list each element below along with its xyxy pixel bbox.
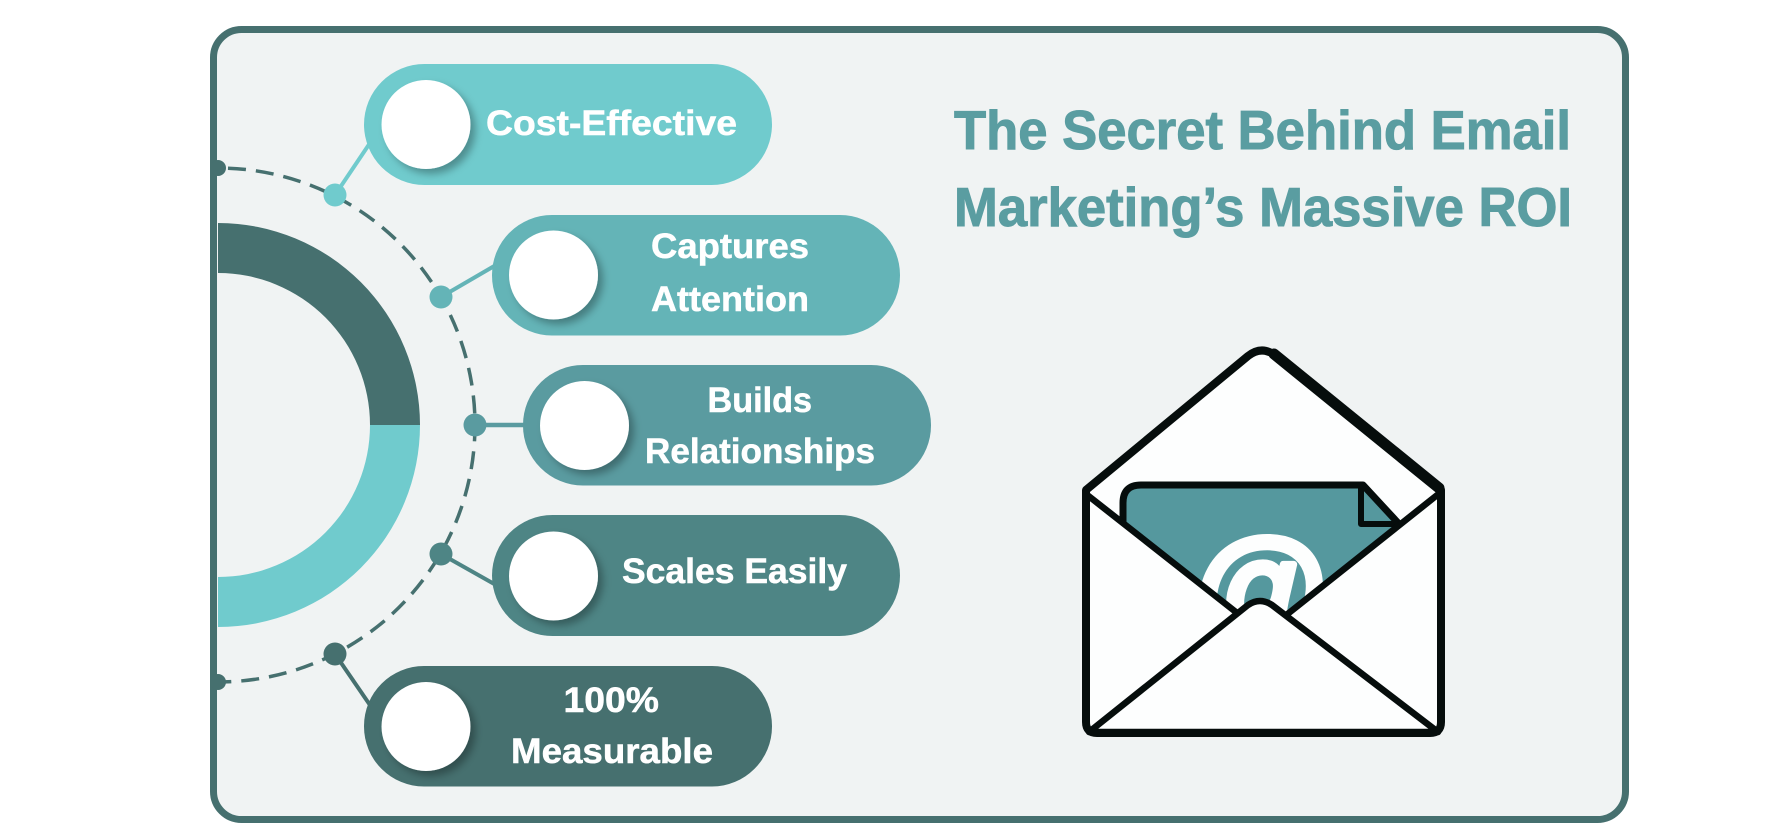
item: Captures Attention	[430, 215, 900, 336]
donut chart: half ring	[218, 223, 420, 627]
dashed orbit arc	[218, 168, 475, 682]
item: Builds Relationships	[464, 365, 931, 486]
item: 100% Measurable: 100%	[564, 681, 659, 720]
item: Cost-Effective: Cost-Effective	[486, 104, 737, 143]
title: Marketing’s Massive ROI	[954, 176, 1572, 238]
title: The Secret Behind Email	[954, 99, 1571, 161]
title	[954, 99, 1572, 238]
icon: open envelope with at-sign letter	[1086, 350, 1441, 733]
item: Captures Attention: Attention	[651, 280, 809, 319]
item: Builds Relationships: Relationships	[645, 432, 875, 471]
orbit end dots	[210, 160, 226, 690]
panel: background card	[214, 30, 1626, 820]
item: Scales Easily	[430, 515, 900, 636]
icon: open envelope with at-sign letter: @	[1195, 511, 1327, 663]
item: Scales Easily: Scales Easily	[622, 552, 848, 591]
item: Builds Relationships: Builds	[708, 381, 812, 420]
item: Captures Attention: Captures	[651, 227, 809, 266]
item: Cost-Effective	[324, 64, 772, 206]
item: 100% Measurable	[324, 642, 772, 786]
item: 100% Measurable: Measurable	[511, 732, 713, 771]
